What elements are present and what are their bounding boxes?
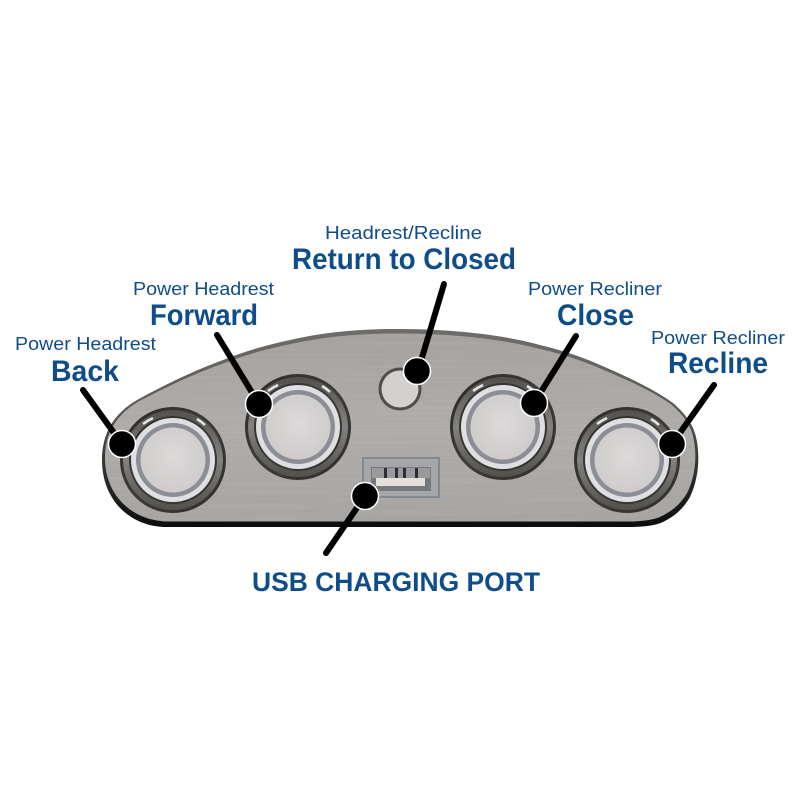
panel: stainless steel control plate (100, 325, 700, 530)
button: power recliner close (450, 374, 556, 480)
label: power headrest forward (133, 278, 274, 332)
callout line: power recliner recline (658, 385, 714, 458)
callout line: USB charging port (326, 482, 378, 553)
callout line: return to closed (404, 284, 444, 384)
panel rim (102, 329, 698, 527)
button: return to closed (378, 368, 422, 410)
label: power headrest forward: Power Headrest (133, 278, 274, 299)
callout line: power headrest forward (217, 335, 272, 418)
label: USB charging port: USB CHARGING PORT (252, 567, 540, 597)
panel face (105, 333, 695, 522)
label: power recliner close: Power Recliner (528, 278, 662, 299)
button: power headrest forward (245, 374, 351, 480)
USB charging port (362, 457, 440, 498)
callout line: power headrest back (83, 390, 136, 458)
label: power recliner close: Close (557, 299, 634, 332)
label: power headrest back (15, 333, 156, 388)
label: power recliner close (528, 278, 662, 332)
button: power headrest back (120, 407, 226, 513)
label: power recliner recline: Power Recliner (651, 327, 785, 348)
label: power recliner recline (651, 327, 785, 380)
callout line: power recliner close (520, 336, 576, 416)
label: headrest/recline return to closed: Headrest/Recline (325, 222, 482, 243)
label: headrest/recline return to closed: Return to Closed (292, 243, 516, 276)
button: power recliner recline (574, 407, 680, 513)
label: headrest/recline return to closed (292, 222, 516, 276)
label: power headrest back: Power Headrest (15, 333, 156, 354)
label: power headrest forward: Forward (150, 299, 258, 332)
label: power headrest back: Back (51, 355, 119, 388)
label: power recliner recline: Recline (668, 347, 768, 380)
